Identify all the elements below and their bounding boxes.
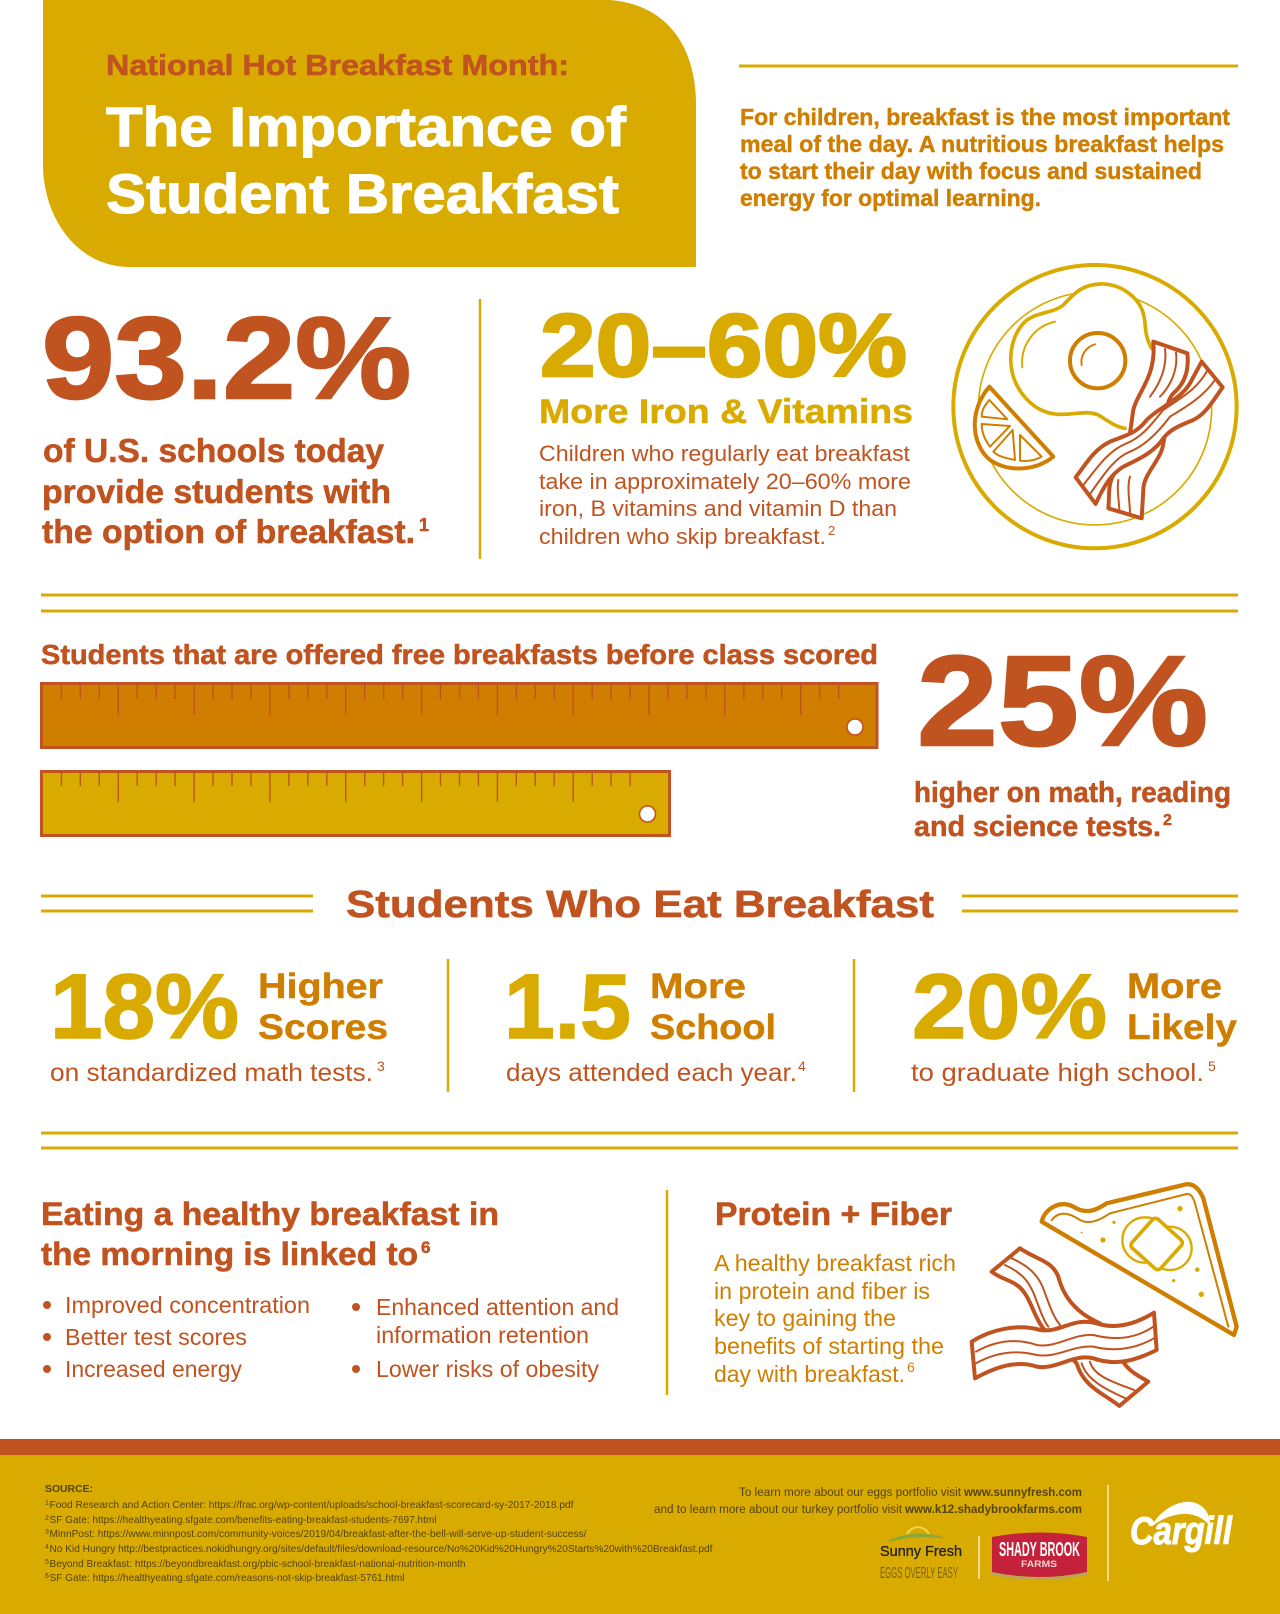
intro text block	[739, 66, 1238, 211]
stat: 25% higher	[914, 630, 1231, 843]
source list: 3	[45, 1529, 49, 1536]
intro text block: energy for optimal learning.	[740, 185, 1041, 211]
stat: 93.2% of schools: provide students with	[42, 473, 391, 510]
source list: SF Gate: https://healthyeating.sfgate.com/benefits-eating-breakfast-students-7697.html	[50, 1514, 436, 1526]
stat: 18% higher scores: Higher	[258, 967, 383, 1006]
stat: 93.2% of schools: of U.S. schools today	[43, 432, 385, 469]
logo: Shady Brook Farms	[992, 1532, 1087, 1580]
stat: 93.2% of schools: 93.2%	[42, 293, 411, 423]
ruler: long orange	[42, 684, 877, 748]
bullet list: benefits	[43, 1292, 619, 1382]
stat: 1.5 more school: 4	[798, 1058, 806, 1074]
stat: 20-60% more iron and vitamins: take in approximately 20–60% more	[539, 469, 911, 494]
stat: 18% higher scores	[50, 956, 388, 1087]
stat: 1.5 more school: days attended each year.	[506, 1059, 797, 1087]
stat: 93.2% of schools: 1	[419, 515, 429, 535]
eyebrow heading: National Hot Breakfast Month:	[106, 50, 569, 82]
title: The Importance of	[106, 95, 626, 158]
source list: 5	[45, 1559, 49, 1566]
source list: MinnPost: https://www.minnpost.com/community-voices/2019/04/breakfast-after-the-bell-will-serve-up-student-success/	[50, 1528, 587, 1540]
stat: 25% higher: 2	[1163, 812, 1172, 829]
panel: title header	[43, 0, 696, 267]
stat: 25% higher: 25%	[917, 630, 1208, 773]
stat: 20-60% more iron and vitamins: 2	[828, 523, 835, 538]
stat: 20-60% more iron and vitamins: 20–60%	[540, 295, 907, 395]
stat: 20% more likely	[911, 956, 1238, 1087]
text block: learn more links: and to learn more about our turkey portfolio visit	[654, 1504, 903, 1516]
stat: 20-60% more iron and vitamins: Children who regularly eat breakfast	[539, 441, 911, 466]
stat: 93.2% of schools: the option of breakfast.	[42, 513, 415, 550]
heading: healthy breakfast: Eating a healthy breakfast in	[41, 1196, 499, 1232]
stat: 93.2% of schools	[42, 293, 429, 550]
text block: learn more links: www.sunnyfresh.com	[963, 1487, 1082, 1499]
stat: 20% more likely: 5	[1208, 1058, 1216, 1074]
stat: 1.5 more school: 1.5	[504, 956, 631, 1058]
stat: 18% higher scores: Scores	[258, 1008, 388, 1047]
bullet list: benefits: Better test scores	[65, 1324, 247, 1350]
text block: protein and fiber: 6	[907, 1359, 915, 1375]
source list: SOURCE:	[45, 1483, 93, 1495]
heading: protein and fiber: Protein + Fiber	[715, 1196, 952, 1232]
stat: 1.5 more school: More	[650, 967, 746, 1006]
logo: Sunny Fresh: EGGS OVERLY EASY	[880, 1565, 958, 1582]
text block: protein and fiber: key to gaining the	[714, 1305, 896, 1331]
intro text block: For children, breakfast is the most important	[740, 104, 1230, 130]
logo: Cargill: Cargill	[1130, 1510, 1233, 1553]
stat: 20-60% more iron and vitamins: iron, B vitamins and vitamin D than	[539, 496, 897, 521]
source list: 6	[45, 1573, 49, 1580]
text block: protein and fiber: benefits of starting the	[714, 1333, 944, 1359]
title: Student Breakfast	[106, 162, 619, 225]
source list: 2	[45, 1515, 49, 1522]
heading: free breakfasts: Students that are offered free breakfasts before class scored	[41, 639, 878, 670]
logo: Shady Brook Farms: FARMS	[1021, 1559, 1057, 1569]
stat: 18% higher scores: 18%	[50, 956, 239, 1058]
stat: 20% more likely: Likely	[1127, 1008, 1238, 1047]
stat: 20-60% more iron and vitamins: children who skip breakfast.	[539, 524, 826, 549]
stat: 20-60% more iron and vitamins	[539, 295, 913, 549]
bullet list: benefits: information retention	[376, 1322, 589, 1348]
stat: 20% more likely: to graduate high school.	[911, 1059, 1204, 1087]
text block: protein and fiber: in protein and fiber is	[714, 1278, 930, 1304]
source list: No Kid Hungry http://bestpractices.nokidhungry.org/sites/default/files/download-resource/No%20Kid%20Hungry%20Starts%20with%20Breakfast.pdf	[50, 1543, 713, 1555]
text block: protein and fiber	[714, 1250, 956, 1387]
heading: healthy breakfast: 6	[421, 1238, 430, 1257]
icon: breakfast plate	[953, 265, 1237, 548]
footer band	[0, 1439, 1280, 1614]
stat: 25% higher: and science tests.	[914, 811, 1161, 843]
stat: 18% higher scores: 3	[377, 1058, 385, 1074]
intro text block: meal of the day. A nutritious breakfast helps	[740, 131, 1224, 157]
bullet list: benefits: Lower risks of obesity	[376, 1356, 599, 1382]
stat: 1.5 more school	[504, 956, 806, 1087]
bullet list: benefits: Improved concentration	[65, 1292, 310, 1318]
source list: Beyond Breakfast: https://beyondbreakfast.org/pbic-school-breakfast-national-nutrition-month	[50, 1558, 466, 1570]
heading: healthy breakfast: the morning is linked to	[41, 1236, 418, 1272]
stat: 25% higher: higher on math, reading	[914, 777, 1231, 809]
stat: 1.5 more school: School	[650, 1008, 776, 1047]
source list: 1	[45, 1500, 49, 1507]
stat: 18% higher scores: on standardized math tests.	[50, 1059, 373, 1087]
text block: protein and fiber: A healthy breakfast rich	[714, 1250, 956, 1276]
bullet list: benefits: Increased energy	[65, 1356, 242, 1382]
title	[106, 95, 626, 225]
heading: students who eat breakfast: Students Who Eat Breakfast	[346, 884, 934, 926]
stat: 20% more likely: 20%	[912, 956, 1107, 1058]
logo: Shady Brook Farms: SHADY BROOK	[999, 1539, 1080, 1561]
source list	[45, 1483, 713, 1584]
text block: protein and fiber: day with breakfast.	[714, 1361, 905, 1387]
source list: 4	[45, 1544, 49, 1551]
source list: Food Research and Action Center: https://frac.org/wp-content/uploads/school-breakfast-scorecard-sy-2017-2018.pdf	[50, 1499, 574, 1511]
ruler: short gold	[42, 772, 670, 836]
heading: healthy breakfast	[41, 1196, 499, 1272]
text block: learn more links: To learn more about our eggs portfolio visit	[739, 1487, 962, 1499]
stat: 20-60% more iron and vitamins: More Iron & Vitamins	[539, 393, 913, 431]
text block: learn more links	[654, 1487, 1082, 1516]
source list: SF Gate: https://healthyeating.sfgate.com/reasons-not-skip-breakfast-5761.html	[50, 1572, 404, 1584]
logo: Sunny Fresh	[880, 1527, 962, 1582]
text block: learn more links: www.k12.shadybrookfarms.com	[904, 1504, 1082, 1516]
intro text block: to start their day with focus and sustained	[740, 158, 1202, 184]
icon: toast and bacon	[972, 1184, 1237, 1406]
bullet list: benefits: Enhanced attention and	[376, 1294, 619, 1320]
stat: 20% more likely: More	[1127, 967, 1222, 1006]
logo: Sunny Fresh: Sunny Fresh	[880, 1543, 962, 1560]
